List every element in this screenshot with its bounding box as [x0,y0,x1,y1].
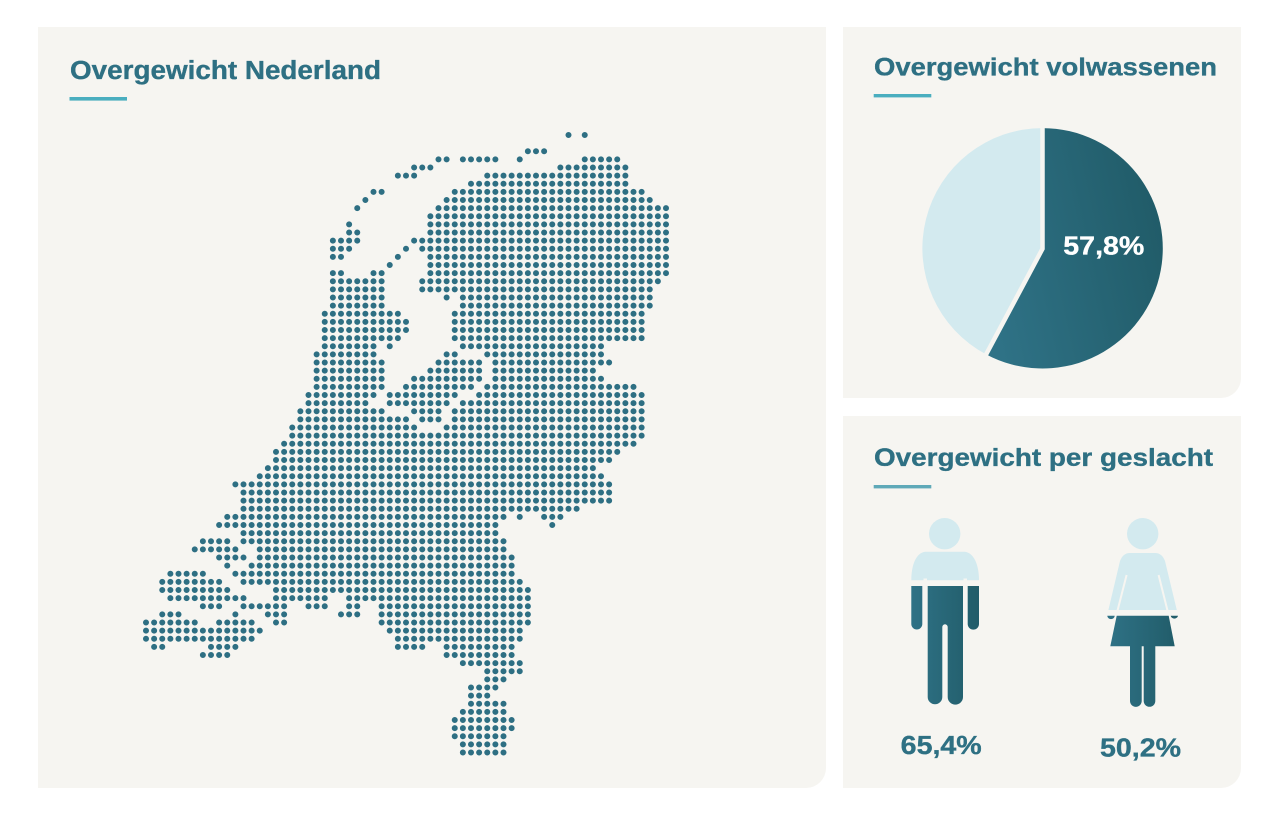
value: man: 65,4% [901,732,982,760]
icon: woman [1107,518,1178,707]
panel: Overgewicht per geslacht [843,416,1241,788]
heading: Overgewicht volwassenen: Overgewicht volwassenen [874,54,1217,82]
heading underline [874,485,931,488]
heading underline [70,97,127,101]
panel: Overgewicht volwassenen [843,27,1241,398]
heading underline [874,94,931,97]
pie value: 57,8% [1063,232,1144,260]
panel: Overgewicht Nederland [38,27,826,788]
pie chart [922,122,1163,368]
icon: man [911,518,979,705]
heading: Overgewicht per geslacht: Overgewicht per geslacht [874,444,1214,472]
dot map of the Netherlands [146,135,667,752]
heading: Overgewicht Nederland: Overgewicht Nederland [70,57,381,85]
value: woman: 50,2% [1100,735,1181,763]
pie slice: rest [922,128,1042,354]
pie slice: 57,8% [986,128,1163,368]
